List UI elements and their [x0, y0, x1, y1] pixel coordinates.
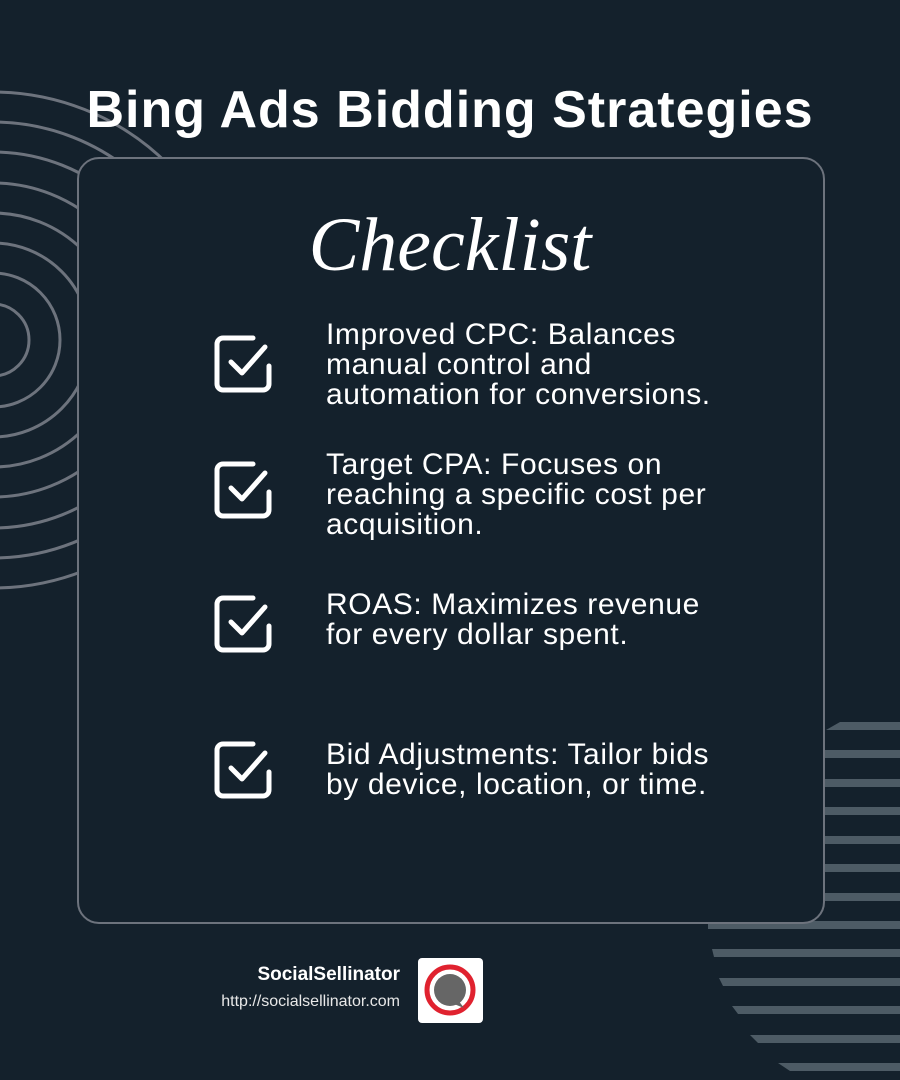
item 1 — [214, 318, 711, 411]
icon: checkbox — [214, 462, 272, 518]
icon: checkbox — [214, 742, 272, 798]
text: Target CPA: Focuses on — [326, 448, 662, 481]
panel: checklist — [77, 157, 825, 924]
heading: Checklist: Checklist — [309, 203, 591, 287]
text: acquisition. — [326, 508, 483, 541]
text: automation for conversions. — [326, 378, 711, 411]
text — [326, 588, 700, 651]
text — [326, 448, 706, 541]
logo — [418, 958, 483, 1023]
item 2 — [214, 448, 706, 541]
url: http://socialsellinator.com — [221, 993, 400, 1010]
text: manual control and — [326, 348, 592, 381]
brand name: SocialSellinator — [257, 964, 400, 985]
text — [326, 318, 711, 411]
text: by device, location, or time. — [326, 768, 707, 801]
icon: checkbox — [214, 336, 272, 392]
item 3 — [214, 588, 700, 652]
text: Improved CPC: Balances — [326, 318, 676, 351]
item 4 — [214, 738, 709, 801]
footer brand — [221, 964, 400, 1010]
text: Bid Adjustments: Tailor bids — [326, 738, 709, 771]
text — [326, 738, 709, 801]
title: Bing Ads Bidding Strategies — [86, 81, 814, 139]
text: reaching a specific cost per — [326, 478, 706, 511]
text: for every dollar spent. — [326, 618, 628, 651]
text: ROAS: Maximizes revenue — [326, 588, 700, 621]
icon: checkbox — [214, 596, 272, 652]
